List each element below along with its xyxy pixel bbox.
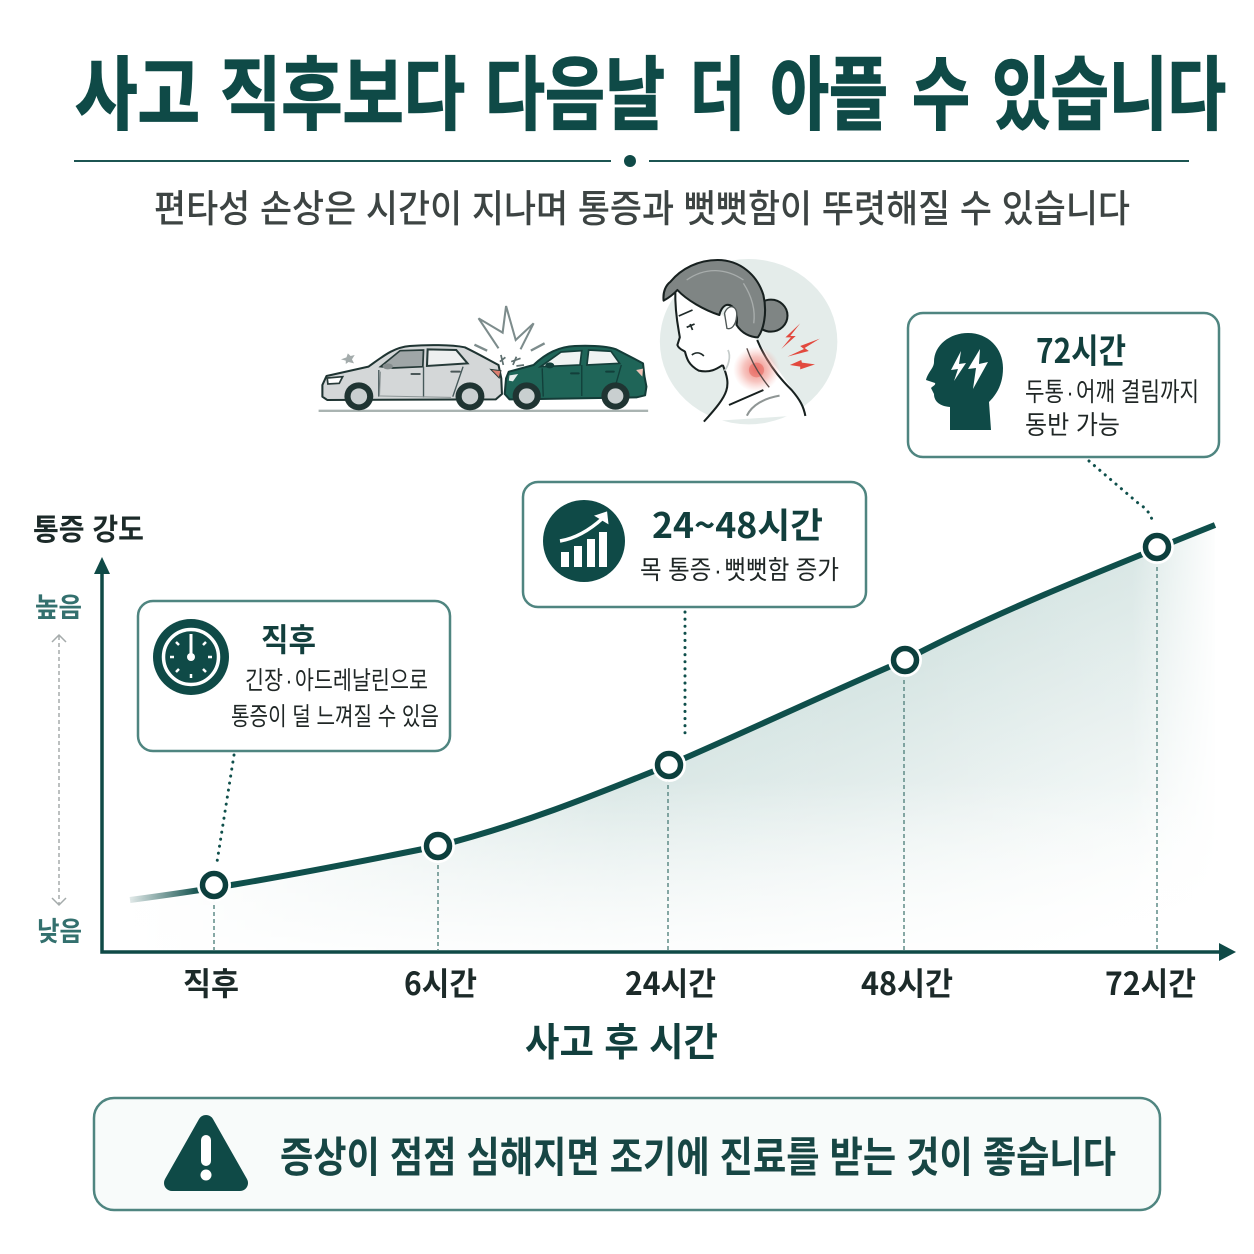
road line (319, 410, 648, 412)
callout: 24 to 48 hours: 24~48시간 (652, 498, 823, 549)
drop lines (214, 560, 1157, 950)
green car (505, 346, 646, 410)
title: 더 (690, 51, 745, 140)
background circle (660, 259, 837, 424)
illustration: woman with neck pain (660, 259, 837, 424)
face and neck (675, 290, 805, 422)
eye, brow and mouth (679, 310, 704, 356)
y scale double arrow (52, 635, 66, 905)
callout: 72 hours (908, 313, 1219, 457)
callout: 72 hours: 두통·어깨 결림까지 (1025, 377, 1199, 407)
callout: immediately after: 직후 (261, 622, 316, 658)
gray car (322, 345, 502, 410)
x axis labels: 직후 (183, 959, 239, 1005)
bottom warning box: 증상이 점점 심해지면 조기에 진료를 받는 것이 좋습니다 (280, 1134, 1116, 1181)
title (75, 51, 1226, 140)
impact burst (474, 306, 545, 366)
callout: immediately after: 통증이 덜 느껴질 수 있음 (231, 703, 439, 731)
icon: clock (153, 619, 229, 695)
title: 다음날 (485, 51, 665, 140)
callout: immediately after: 긴장·아드레날린으로 (245, 667, 428, 695)
hair bun (754, 300, 787, 332)
callout: 24 to 48 hours: 목 통증·뻣뻣함 증가 (640, 555, 839, 585)
x axis labels: 24시간 (625, 959, 716, 1005)
x axis labels: 72시간 (1105, 959, 1196, 1005)
chart area fill (130, 525, 1215, 950)
title: 사고 (75, 51, 200, 140)
title: 아플 (770, 51, 888, 140)
curve markers (197, 530, 1174, 902)
pain glow (733, 347, 780, 392)
x axis labels (183, 959, 1196, 1005)
hair (663, 260, 765, 337)
callout: 72 hours: 동반 가능 (1025, 410, 1120, 440)
callout connectors (217, 461, 1153, 862)
pain bolts (781, 323, 820, 369)
illustration: car collision (319, 306, 648, 412)
callout: 24 to 48 hours (523, 482, 866, 607)
y axis high label: 높음 (35, 593, 82, 623)
y axis low label: 낮음 (37, 917, 82, 947)
icon: warning triangle (172, 1123, 240, 1183)
callout: immediately after (138, 601, 450, 751)
bottom warning box (94, 1098, 1160, 1210)
x axis labels: 6시간 (404, 959, 477, 1005)
y axis title: 통증 강도 (33, 514, 144, 547)
subtitle: 편타성 손상은 시간이 지나며 통증과 뻣뻣함이 뚜렷해질 수 있습니다 (154, 189, 1130, 231)
icon: head with lightning (926, 333, 1003, 430)
pain curve (130, 525, 1215, 900)
ear (725, 307, 737, 329)
x axis title: 사고 후 시간 (525, 1022, 718, 1065)
x axis labels: 48시간 (861, 959, 953, 1005)
callout: 72 hours: 72시간 (1036, 324, 1126, 373)
title: 수 (912, 51, 970, 140)
title: 직후보다 (220, 51, 465, 140)
axes (94, 557, 1236, 961)
title divider (74, 155, 1189, 167)
icon: rising chart (543, 500, 625, 582)
